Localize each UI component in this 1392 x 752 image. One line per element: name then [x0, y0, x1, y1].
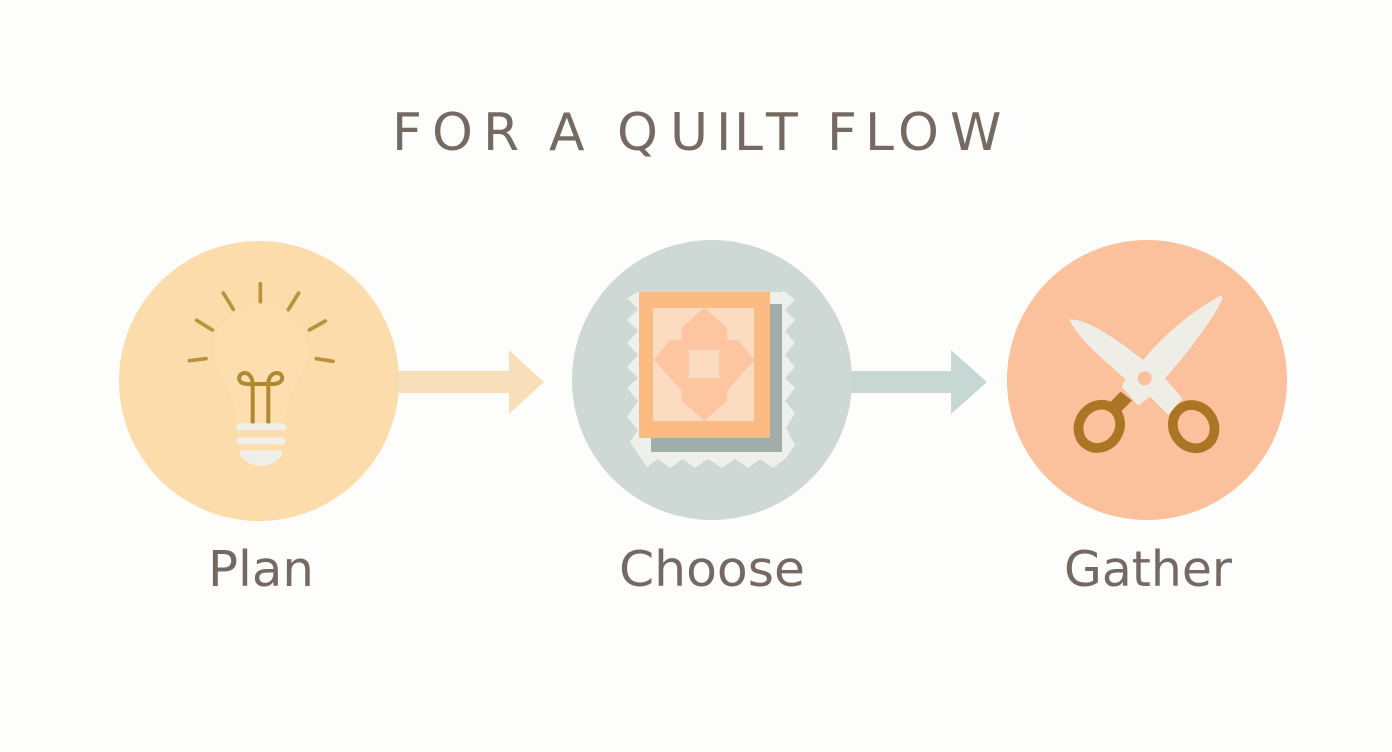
- arrow: plan to choose: [395, 350, 544, 414]
- circle: gather: [1007, 240, 1287, 520]
- arrow: choose to gather: [848, 350, 987, 414]
- bulb glass: [213, 307, 308, 423]
- label: Plan: Plan: [208, 541, 314, 598]
- panel: plan step: [119, 241, 399, 598]
- quilt flower: [655, 308, 754, 420]
- quilt centre square: [689, 350, 719, 378]
- bulb base: [236, 423, 286, 466]
- circle: choose: [572, 240, 852, 520]
- label: Gather: Gather: [1064, 541, 1233, 598]
- icon: light bulb: [189, 284, 333, 466]
- quilt shadow: [651, 304, 782, 452]
- scissors handle connector: [1108, 392, 1132, 412]
- icon: quilt block: [627, 290, 795, 468]
- title: FOR A QUILT FLOW: [392, 103, 1001, 163]
- icon: scissors: [1069, 296, 1223, 456]
- label: Choose: Choose: [619, 541, 805, 598]
- scissors blades: [1069, 296, 1222, 415]
- quilt border: [639, 292, 770, 438]
- scissors pivot: [1138, 371, 1152, 385]
- panel: choose step: [572, 240, 852, 598]
- quilt inner panel: [653, 308, 754, 421]
- panel: gather step: [1007, 240, 1287, 598]
- light rays: [189, 284, 333, 361]
- circle: plan: [119, 241, 399, 521]
- zigzag fabric backing: [627, 290, 795, 468]
- scissors handles: [1070, 397, 1223, 456]
- filament: [239, 373, 282, 423]
